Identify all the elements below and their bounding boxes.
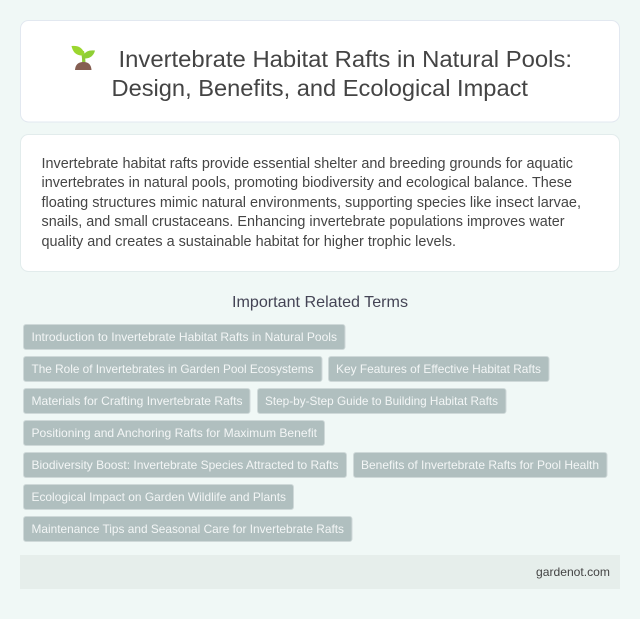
tag: Materials for Crafting Invertebrate Rafts bbox=[32, 394, 243, 408]
tag bbox=[354, 452, 607, 478]
footer: gardenot.com bbox=[536, 565, 610, 579]
tag bbox=[24, 356, 322, 382]
text block: introduction: floating structures mimic natural environments, supporting species like insect larvae, bbox=[42, 195, 581, 211]
title: Invertebrate Habitat Rafts in Natural Pools: bbox=[118, 46, 572, 72]
tag bbox=[24, 452, 346, 478]
icon: seedling bbox=[72, 46, 95, 70]
tag bbox=[24, 388, 250, 414]
tag: Biodiversity Boost: Invertebrate Species Attracted to Rafts bbox=[32, 458, 338, 472]
tag: The Role of Invertebrates in Garden Pool Ecosystems bbox=[32, 362, 314, 376]
text block: introduction: invertebrates in natural pools, promoting biodiversity and ecological balance. These bbox=[42, 175, 572, 191]
tag: Benefits of Invertebrate Rafts for Pool Health bbox=[361, 458, 599, 472]
tag: Ecological Impact on Garden Wildlife and Plants bbox=[32, 490, 286, 504]
tag: Maintenance Tips and Seasonal Care for Invertebrate Rafts bbox=[32, 522, 344, 536]
text block: introduction: quality and creates a sustainable habitat for higher trophic levels. bbox=[42, 234, 456, 250]
title: Design, Benefits, and Ecological Impact bbox=[112, 75, 528, 101]
tag bbox=[258, 388, 506, 414]
tag bbox=[24, 516, 352, 542]
panel: introduction bbox=[20, 134, 620, 272]
title bbox=[112, 46, 572, 101]
footer bbox=[20, 555, 620, 589]
tag: Step-by-Step Guide to Building Habitat Rafts bbox=[265, 394, 498, 408]
text block: introduction bbox=[42, 156, 581, 250]
heading: important related terms: Important Related Terms bbox=[232, 294, 408, 311]
tag: Positioning and Anchoring Rafts for Maximum Benefit bbox=[32, 426, 318, 440]
text block: introduction: snails, and small crustaceans. Enhancing invertebrate populations improves water bbox=[42, 214, 565, 230]
tag bbox=[24, 484, 294, 510]
panel: title card bbox=[20, 20, 620, 122]
tag bbox=[24, 324, 345, 350]
tag list bbox=[24, 324, 607, 542]
tag bbox=[24, 420, 324, 446]
tag: Introduction to Invertebrate Habitat Rafts in Natural Pools bbox=[32, 330, 337, 344]
tag bbox=[328, 356, 549, 382]
tag: Key Features of Effective Habitat Rafts bbox=[336, 362, 541, 376]
text block: introduction: Invertebrate habitat rafts provide essential shelter and breeding grounds for aquatic bbox=[42, 156, 573, 172]
